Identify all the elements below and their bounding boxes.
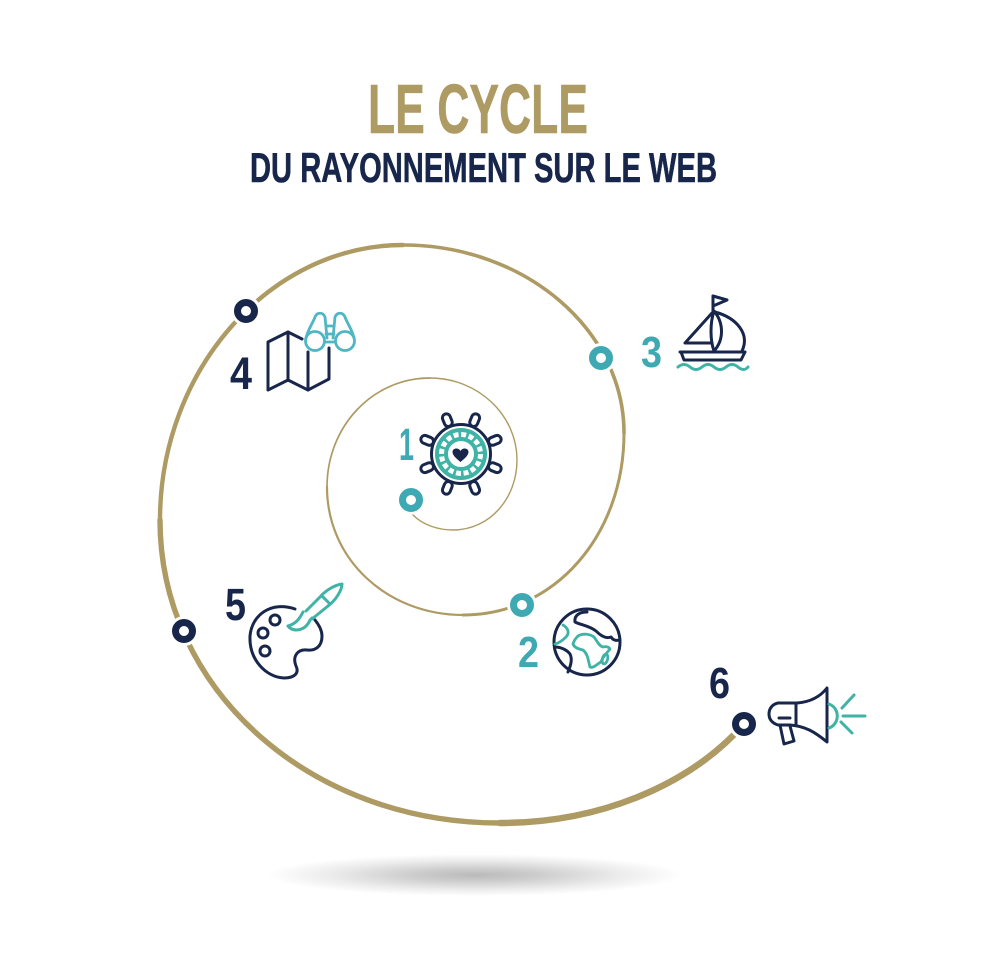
marker halos (169, 296, 759, 739)
subtitle: DU RAYONNEMENT SUR LE WEB (250, 144, 717, 191)
number 6: 6 (709, 659, 730, 708)
heading: le cycle: LE CYCLE (368, 70, 588, 148)
icon: map with binoculars (268, 313, 354, 390)
number 1: 1 (399, 419, 414, 470)
icon: ship wheel with heart (420, 413, 502, 495)
number 4: 4 (230, 348, 252, 399)
marker 4 (238, 302, 254, 320)
icon: sailboat (678, 296, 748, 370)
number 5: 5 (225, 579, 246, 630)
step markers (169, 296, 759, 739)
icon: palette and brush (250, 584, 342, 678)
title (250, 70, 717, 191)
number 2: 2 (518, 628, 539, 677)
gold spiral (160, 245, 744, 823)
marker 2 (514, 596, 530, 614)
icon: globe (554, 609, 620, 675)
icon: megaphone (769, 688, 865, 744)
marker 6 (736, 716, 752, 732)
number 3: 3 (641, 328, 662, 377)
marker 5 (176, 622, 192, 640)
marker 3 (592, 350, 610, 366)
shadow under spiral (267, 854, 683, 896)
marker 1 (402, 492, 420, 508)
